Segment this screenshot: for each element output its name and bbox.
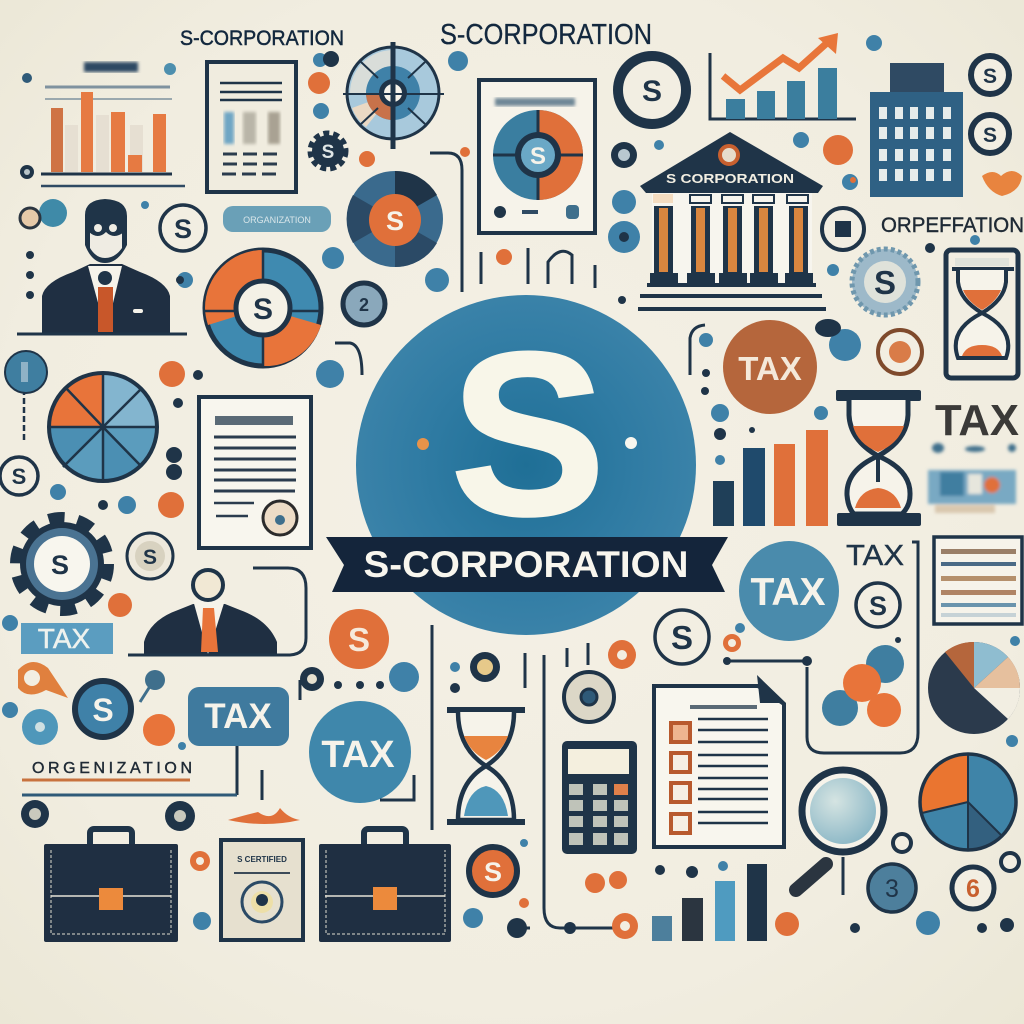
number coins bottom right: 3	[885, 875, 899, 903]
donut chart S: S	[253, 293, 273, 326]
pie S dark	[347, 171, 443, 267]
label: Orpeffation: ORPEFFATION	[881, 214, 1024, 237]
tax speech bubble: TAX	[204, 697, 272, 736]
donut chart S	[205, 250, 321, 366]
icon: framed pie S: S	[530, 143, 546, 170]
gear coin right: S	[874, 264, 896, 301]
pill label top: ORGANIZATION	[243, 215, 311, 225]
businessman lower	[128, 568, 306, 655]
businessman top left	[17, 199, 187, 334]
tax ticket right	[928, 443, 1016, 513]
icon: gear S top	[310, 133, 346, 169]
central emblem with big S: S	[451, 305, 605, 564]
icons: S coins right top: S	[983, 65, 997, 88]
small B coin by Orpeffation	[822, 208, 864, 250]
label tax with coin and bracket: TAX	[846, 540, 904, 572]
small coin: 2	[359, 295, 369, 315]
label TAX left	[21, 623, 113, 654]
decorative coin	[878, 330, 922, 374]
tax badge brown	[723, 320, 817, 414]
bar chart: top left	[20, 62, 185, 186]
small S coin far left: S	[12, 464, 26, 489]
S badge orange: S	[348, 621, 370, 658]
tax badge bottom left	[309, 701, 411, 803]
icons: S coins right top: S	[983, 124, 997, 147]
certificate bottom	[221, 840, 303, 940]
pill label top	[223, 206, 331, 232]
icon: S coin: S	[174, 214, 192, 244]
tax badge bottom left: TAX	[321, 734, 395, 776]
tax badge brown: TAX	[738, 350, 802, 387]
icon: courthouse with S-Corporation pediment: S CORPORATION	[666, 171, 794, 186]
icon: S coin top	[618, 56, 686, 124]
icon: S coin	[160, 205, 206, 251]
briefcase left	[44, 829, 178, 942]
growth chart top	[710, 33, 856, 119]
icon: document top	[207, 62, 296, 192]
heading: S-Corporation top left: S-CORPORATION	[180, 27, 344, 50]
S coin with ring	[127, 533, 173, 579]
icon: blue and brown rings beside man	[20, 199, 67, 228]
certificate bottom: S CERTIFIED	[237, 855, 287, 864]
hourglass center right	[836, 390, 921, 526]
icon: office building	[870, 63, 963, 197]
number coins bottom right	[868, 834, 1019, 912]
heading: S-Corporation top centre: S-CORPORATION	[440, 19, 652, 51]
pin at left	[5, 351, 47, 442]
S coin center	[655, 610, 709, 664]
pie chart dark right	[928, 642, 1020, 734]
ring coin	[564, 672, 614, 722]
S coin center: S	[671, 619, 693, 656]
icon: gear S top: S	[322, 142, 334, 163]
label tax with coin and bracket: S	[869, 591, 887, 621]
icon: courthouse with S-Corporation pediment	[638, 132, 826, 309]
gear coin right	[852, 249, 918, 315]
icon: target wheel	[343, 42, 444, 149]
document left center	[199, 397, 311, 548]
label tax with coin and bracket	[807, 540, 918, 753]
striped table right	[934, 537, 1022, 624]
bar chart center right	[713, 430, 828, 526]
ribbon banner S-Corporation: S-CORPORATION	[364, 544, 688, 585]
bar chart bottom	[652, 864, 767, 941]
pie S dark: S	[386, 206, 404, 236]
gear S left: S	[51, 550, 69, 580]
gear S left	[16, 518, 108, 610]
pie chart left	[49, 373, 157, 481]
icons: S coins right top	[971, 56, 1022, 196]
icon: S coin top: S	[642, 75, 662, 108]
tax badge blue right: TAX	[750, 571, 826, 614]
pie chart orange blue right bottom	[920, 754, 1016, 850]
central emblem with big S	[356, 295, 696, 635]
tax badge blue right	[739, 541, 839, 641]
small S coin far left	[0, 457, 38, 495]
document checklist	[654, 675, 786, 847]
S coin with bubbles left: S	[92, 692, 114, 728]
calculator	[562, 741, 637, 854]
small coin	[343, 283, 385, 325]
briefcase right	[319, 829, 451, 942]
blob diagram right	[822, 645, 904, 727]
S coin with bubbles left	[18, 662, 175, 746]
icon: framed pie S	[479, 80, 595, 233]
magnifier	[796, 770, 884, 895]
hourglass phone	[946, 250, 1018, 378]
label: tax right: TAX	[935, 396, 1019, 445]
tax speech bubble	[188, 687, 289, 795]
hourglass bottom	[447, 710, 525, 822]
S badge bottom	[469, 847, 517, 895]
S badge bottom: S	[484, 857, 502, 887]
ribbon banner S-Corporation	[326, 537, 728, 592]
S coin with ring: S	[143, 546, 157, 569]
number coins bottom right: 6	[966, 875, 980, 903]
label TAX left: TAX	[38, 623, 91, 654]
S badge orange	[329, 609, 389, 669]
label organization: ORGENIZATION	[32, 760, 192, 777]
